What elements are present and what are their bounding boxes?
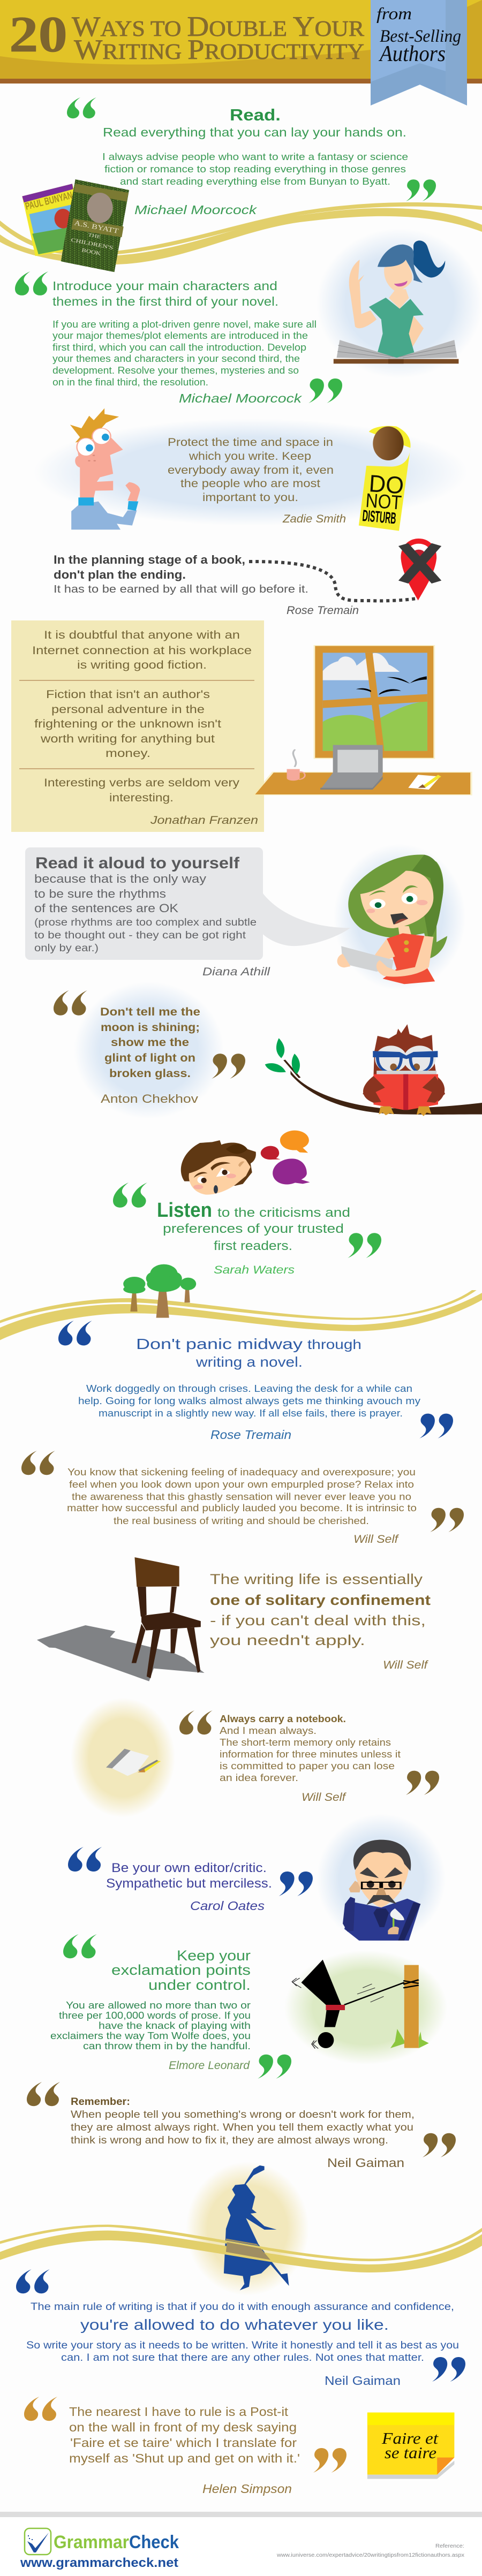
author: Will Self: [383, 1659, 428, 1671]
text: the people who are most: [180, 478, 320, 490]
body text: and start reading everything else from Bunyan to Byatt.: [120, 176, 390, 187]
illustration: books: CHILDREN'S: [70, 237, 114, 251]
tip: be your own editor: [68, 1814, 446, 1944]
author: Carol Oates: [190, 1899, 265, 1913]
text: The short-term memory only retains: [220, 1737, 391, 1748]
text: [100, 1006, 200, 1080]
icon: crossed-out map pin: [401, 539, 436, 601]
heading: [52, 279, 278, 308]
heading: Read it aloud to yourself: [35, 854, 240, 872]
references: [276, 2543, 464, 2558]
tip: whatever you like: [16, 2269, 465, 2388]
panel: Jonathan Franzen quotes: [11, 620, 264, 832]
icon: close quote: [313, 2448, 347, 2473]
body text: help. Going for long walks almost always gets me thinking avouch my: [78, 1396, 420, 1406]
arrow: dashed path: [249, 562, 417, 601]
icon: close quote: [432, 2357, 465, 2382]
illustration: books: PAUL BUNYAN: [24, 190, 74, 213]
heading: through: [307, 1337, 362, 1352]
author: Rose Tremain: [210, 1428, 291, 1442]
body text: first third, which you can call the introduction. Develop: [52, 342, 306, 353]
body text: your themes and characters in your second third, the: [52, 353, 300, 364]
body text: to be sure the rhythms: [34, 887, 166, 900]
heading: themes in the first third of your novel.: [52, 294, 278, 308]
text: Remember:: [71, 2096, 130, 2108]
heading: In the planning stage of a book,: [54, 553, 245, 566]
text: myself as 'Shut up and get on with it.': [69, 2451, 300, 2465]
icon: open quote: [21, 1451, 55, 1475]
icon: open quote: [179, 1710, 213, 1734]
illustration: sticky note: [367, 2413, 454, 2479]
text: one of solitary confinement: [210, 1592, 431, 1608]
body text: [52, 319, 317, 388]
ribbon: from best-selling authors: Best-Selling: [380, 27, 461, 46]
body text: You are allowed no more than two or: [66, 2000, 251, 2011]
author: Helen Simpson: [202, 2482, 292, 2496]
text: on the wall in front of my desk saying: [69, 2420, 297, 2434]
illustration: do not disturb sign: DISTURB: [362, 507, 397, 527]
tip: Don't tell me the moon is shining: [54, 982, 245, 1119]
illustration: sticky note: Faire et: [381, 2429, 439, 2448]
quote 2: Fiction that isn't an author's: [46, 688, 210, 701]
icon: close quote: [423, 2133, 456, 2157]
text: they are almost always right. When you tell them exactly what you: [71, 2122, 413, 2133]
text: moon is shining;: [101, 1021, 200, 1034]
text: [69, 2405, 300, 2465]
text: Be your own editor/critic.: [111, 1861, 267, 1875]
illustration: worried man: [70, 408, 140, 529]
tip: Don't plan the ending: [54, 539, 436, 617]
body text: exclaimers the way Tom Wolfe does, you: [50, 2031, 251, 2041]
quote 1: [32, 629, 252, 671]
tip: Introduce your main characters: [15, 229, 482, 405]
ribbon: from best-selling authors: [371, 0, 467, 105]
author: Neil Gaiman: [327, 2156, 404, 2170]
body text: have the knack of playing with: [99, 2020, 251, 2031]
text: When people tell you something's wrong or doesn't work for them,: [71, 2109, 415, 2120]
illustration: exclamation mark tied to post: [284, 1950, 447, 2065]
illustration: books: THE: [88, 232, 102, 240]
heading: don't plan the ending.: [54, 568, 186, 581]
logo: GrammarCheck: www.grammarcheck.net: [20, 2556, 178, 2570]
tip: exclamation points: [50, 1934, 447, 2079]
body text: Work doggedly on through crises. Leaving the desk for a while can: [86, 1383, 412, 1394]
body text: your major themes/plot elements are introduced in the: [52, 330, 308, 341]
swoosh: top: [0, 202, 482, 264]
body text: the real business of writing and should be cherished.: [114, 1516, 369, 1526]
icon: close quote: [406, 1771, 439, 1795]
body text: manuscript in a slightly new way. If all else fails, there is prayer.: [99, 1408, 403, 1419]
heading: Introduce your main characters and: [52, 279, 277, 293]
tip: post-it rule: [24, 2397, 454, 2496]
text: which you write. Keep: [189, 450, 311, 463]
references: Reference:: [435, 2543, 464, 2549]
heading: Read.: [230, 105, 281, 124]
text: important to you.: [202, 491, 298, 504]
body text: [78, 1383, 420, 1419]
text: broken glass.: [109, 1067, 191, 1080]
illustration: sticky note: se taire: [385, 2443, 436, 2462]
body text: on in the final third, the resolution.: [52, 377, 208, 388]
text: Don't tell me the: [100, 1006, 200, 1018]
body text: [102, 151, 408, 187]
illustration: books: A.S. BYATT: [73, 218, 119, 235]
text: preferences of your trusted: [163, 1222, 344, 1236]
tip: always carry a notebook: [71, 1698, 439, 1817]
text: Listen: [157, 1199, 212, 1222]
text: [168, 436, 334, 504]
illustration: window and desk: [253, 645, 472, 795]
text: can. I am not sure that there are any other rules. Not ones that matter.: [61, 2352, 424, 2363]
illustration: boy with speech bubbles: [181, 1131, 310, 1195]
body text: [50, 2000, 251, 2051]
quote 3: [44, 777, 240, 804]
body text: can throw them in by the handful.: [83, 2041, 251, 2051]
illustration: man with glasses: [317, 1814, 446, 1944]
ribbon: from best-selling authors: Authors: [378, 42, 446, 66]
illustration: chair: [37, 1557, 205, 1681]
body text: [67, 1467, 417, 1526]
illustration: dancer and swoosh: [0, 2162, 482, 2295]
title: 20: [9, 6, 67, 63]
icon: close quote: [279, 1872, 313, 1896]
icon: open quote: [67, 97, 96, 118]
heading: under control.: [148, 1977, 251, 1993]
body text: of the sentences are OK: [34, 901, 178, 915]
header banner: [0, 0, 482, 84]
illustration: woman reading: [317, 229, 482, 378]
text: you're allowed to do whatever you like.: [80, 2316, 389, 2333]
glow background: [34, 419, 468, 526]
text: [106, 1861, 272, 1891]
body text: matter how successful and publicly lauded you become. It is intrinsic to: [67, 1503, 417, 1513]
heading: writing a novel.: [195, 1354, 303, 1370]
text: everybody away from it, even: [168, 464, 334, 476]
author: Anton Chekhov: [101, 1092, 198, 1105]
text: 'Faire et se taire' which I translate for: [70, 2436, 297, 2450]
heading: Read everything that you can lay your hands on.: [103, 125, 406, 139]
text: The main rule of writing is that if you do it with enough assurance and confidence,: [31, 2301, 454, 2313]
text: The writing life is essentially: [210, 1571, 423, 1587]
text: Always carry a notebook.: [220, 1714, 346, 1724]
heading: [136, 1336, 362, 1370]
heading: Don't panic midway: [136, 1336, 303, 1352]
author: Michael Moorcock: [179, 391, 303, 405]
footer: [0, 2512, 482, 2576]
body text: It has to be earned by all that will go before it.: [54, 584, 308, 595]
body text: fiction or romance to stop reading everything in those genres: [104, 164, 406, 175]
text: [220, 1714, 401, 1783]
icon: close quote: [348, 1233, 381, 1258]
tip: remember: [27, 2082, 456, 2170]
author: Will Self: [302, 1791, 347, 1804]
body text: only by ear.): [34, 943, 99, 954]
body text: feel when you look down upon your own empurpled prose? Relax into: [69, 1479, 414, 1490]
author: Will Self: [353, 1533, 399, 1545]
illustration: girl reading: [334, 844, 466, 990]
icon: close quote: [258, 2055, 291, 2079]
quote 2: frightening or the unknown isn't: [34, 718, 221, 730]
text: glint of light on: [104, 1052, 195, 1064]
text: show me the: [111, 1036, 189, 1049]
body text: three per 100,000 words of prose. If you: [59, 2010, 251, 2021]
heading: [54, 553, 245, 581]
body text: [34, 872, 257, 954]
quote 1: It is doubtful that anyone with an: [44, 629, 240, 641]
quote 2: [34, 688, 221, 760]
quote 1: Internet connection at his workplace: [32, 645, 252, 657]
text: you needn't apply.: [210, 1632, 365, 1648]
body text: If you are writing a plot-driven genre novel, make sure all: [52, 319, 317, 330]
icon: close quote: [212, 1054, 245, 1079]
tip: Read it aloud: [25, 844, 466, 990]
author: Rose Tremain: [287, 604, 359, 617]
author: Diana Athill: [202, 966, 271, 978]
text: [26, 2301, 459, 2363]
ribbon: from best-selling authors: from: [376, 4, 412, 23]
tip: Read: [22, 97, 436, 272]
swoosh: middle: [0, 1290, 482, 1340]
heading: [111, 1948, 251, 1993]
logo: GrammarCheck: Check: [129, 2532, 179, 2552]
author: Sarah Waters: [214, 1264, 295, 1276]
text: Protect the time and space in: [168, 436, 333, 449]
icon: open quote: [63, 1934, 97, 1958]
body text: (prose rhythms are too complex and subtle: [34, 917, 257, 928]
body text: You know that sickening feeling of inadequacy and overexposure; you: [67, 1467, 416, 1478]
tip: Don't panic midway: [58, 1321, 453, 1442]
logo: GrammarCheck: Grammar: [54, 2532, 129, 2552]
text: [210, 1571, 431, 1648]
body text: the awareness that this ghastly sensation will never ever leave you no: [72, 1491, 411, 1502]
quote 3: interesting.: [109, 792, 174, 804]
author: Neil Gaiman: [325, 2374, 401, 2388]
icon: open quote: [24, 2397, 57, 2421]
tip: sickening feeling of inadequacy: [21, 1451, 464, 1545]
author: Michael Moorcock: [134, 203, 258, 217]
text: Sympathetic but merciless.: [106, 1876, 272, 1891]
text: [71, 2096, 415, 2146]
illustration: trees: [123, 1264, 196, 1318]
icon: open quote: [58, 1321, 92, 1345]
text: to the criticisms and: [217, 1206, 350, 1220]
tip: Listen: [113, 1131, 381, 1276]
illustration: do not disturb sign: DO: [368, 469, 405, 499]
body text: to be thought out - they can be got right: [34, 930, 246, 941]
illustration: do not disturb sign: NOT: [365, 489, 402, 514]
icon: open quote: [113, 1183, 147, 1208]
text: So write your story as it needs to be written. Write it honestly and tell it as best as you: [26, 2340, 459, 2351]
body text: I always advise people who want to write a fantasy or science: [102, 151, 408, 162]
text: And I mean always.: [220, 1725, 317, 1736]
logo: GrammarCheck: [20, 2528, 179, 2570]
quote 3: Interesting verbs are seldom very: [44, 777, 240, 789]
author: Elmore Leonard: [169, 2059, 250, 2072]
heading: [103, 105, 406, 139]
illustration: books: BOOK: [81, 247, 102, 257]
icon: open quote: [27, 2082, 60, 2106]
tip: Protect the time and space: [34, 408, 468, 531]
glow background: [74, 982, 224, 1119]
icon: close quote: [419, 1414, 453, 1438]
illustration: notebook and pencil: [71, 1698, 175, 1817]
illustration: books: [22, 179, 129, 272]
text: information for three minutes unless it: [220, 1749, 401, 1760]
text: The nearest I have to rule is a Post-it: [69, 2405, 289, 2419]
icon: close quote: [308, 378, 342, 403]
title: [9, 6, 365, 65]
text: an idea forever.: [220, 1772, 298, 1783]
illustration: do not disturb sign: [359, 426, 411, 531]
heading: Keep your: [177, 1948, 251, 1964]
icon: open quote: [16, 2269, 50, 2293]
icon: open quote: [68, 1847, 102, 1872]
quote 2: personal adventure in the: [51, 703, 205, 716]
illustration: owl reading on a branch: [265, 1024, 482, 1116]
heading: exclamation points: [111, 1962, 251, 1978]
icon: open quote: [54, 990, 87, 1016]
author: Zadie Smith: [282, 513, 346, 525]
text: first readers.: [214, 1239, 292, 1253]
author: Jonathan Franzen: [150, 814, 258, 827]
quote 2: money.: [106, 747, 150, 760]
body text: development. Resolve your themes, mysteries and so: [52, 365, 299, 376]
quote 1: is writing good fiction.: [77, 659, 207, 671]
title: WRITING PRODUCTIVITY: [74, 34, 364, 65]
tip: solitary confinement: [37, 1557, 431, 1681]
icon: close quote: [430, 1508, 464, 1532]
icon: close quote: [406, 179, 436, 201]
text: is committed to paper you can lose: [220, 1761, 395, 1771]
icon: open quote: [15, 271, 48, 296]
references: www.iuniverse.com/expertadvice/20writingtipsfrom12fictionauthors.aspx: [276, 2552, 464, 2558]
title: WAYS TO DOUBLE YOUR: [72, 11, 365, 42]
body text: because that is the only way: [34, 872, 206, 885]
text: [157, 1199, 350, 1253]
quote 2: worth writing for anything but: [40, 733, 215, 745]
text: - if you can't deal with this,: [210, 1612, 426, 1628]
text: think is wrong and how to fix it, they are almost always wrong.: [71, 2135, 388, 2146]
speech bubble: [25, 847, 350, 960]
